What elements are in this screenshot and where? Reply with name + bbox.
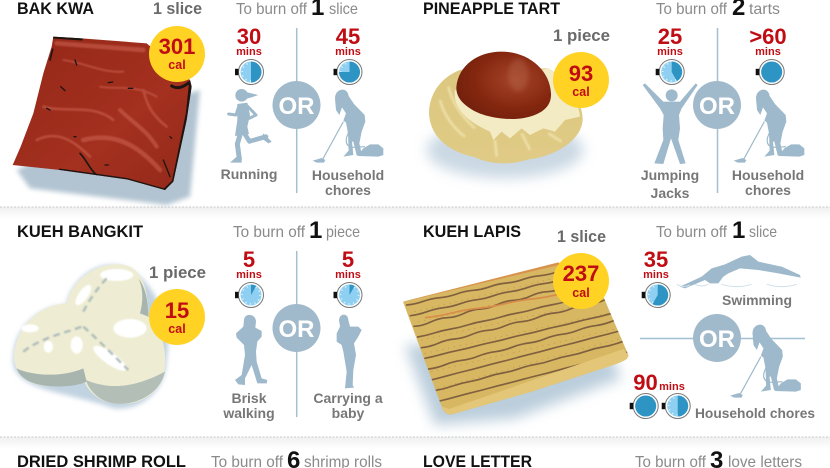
label: household chores: chores [745, 182, 791, 198]
stopwatch: chores 45 mins: mins [335, 46, 361, 58]
stopwatch: carrying a baby 5 mins: 5 [342, 247, 354, 272]
stopwatch: jumping jacks 25 mins: 25 [658, 24, 682, 49]
burn heading [635, 447, 802, 468]
label: jumping jacks: Jumping [641, 167, 699, 183]
divider and OR [693, 28, 741, 193]
illustration: pineapple tart [427, 52, 583, 178]
burn heading [211, 447, 382, 468]
burn heading [236, 0, 358, 21]
icon: person vacuuming [730, 325, 801, 398]
calorie badge: 237 cal [553, 253, 609, 309]
calorie badge: 15 cal: cal [168, 322, 186, 336]
panel: dried shrimp roll [17, 447, 382, 468]
stopwatches: chores 90 mins: 90 [633, 370, 658, 395]
stopwatch: brisk walking 5 mins [235, 247, 264, 308]
serving: 1 piece: 1 piece [149, 263, 206, 282]
icon: person vacuuming [313, 90, 383, 163]
panel: kueh lapis [403, 217, 815, 425]
stopwatch: running 30 mins [235, 24, 264, 84]
stopwatch: chores over 60 mins: mins [755, 46, 781, 58]
calorie badge: 93 cal: cal [572, 85, 590, 99]
burn heading: 1 [309, 217, 322, 244]
title: kueh lapis: KUEH LAPIS [423, 222, 521, 241]
calorie badge: 93 cal: 93 [569, 61, 593, 86]
label: brisk walking [222, 390, 275, 421]
burn heading: To burn off [236, 1, 308, 18]
calorie badge: 237 cal: 237 [563, 261, 599, 286]
burn heading: tarts [749, 1, 780, 18]
stopwatch: brisk walking 5 mins: 5 [243, 247, 255, 272]
stopwatches: chores 90 mins [630, 370, 690, 418]
burn heading [233, 217, 360, 244]
stopwatch: jumping jacks 25 mins [656, 24, 684, 84]
burn heading: To burn off [656, 224, 728, 241]
divider and OR [272, 251, 320, 417]
label: household chores: chores [325, 182, 371, 198]
label: household chores: Household [732, 167, 804, 183]
icon: runner [229, 89, 272, 163]
stopwatch: swimming 35 mins: mins [643, 269, 669, 281]
icon: woman carrying baby [337, 315, 362, 388]
label: household chores: Household [312, 167, 384, 183]
illustration: kueh lapis slice [403, 262, 640, 425]
stopwatch: swimming 35 mins [642, 247, 670, 308]
divider and OR [272, 28, 320, 193]
label: household chores: Household chores [695, 405, 815, 421]
label: carrying a baby: Carrying a [313, 390, 383, 406]
panel: bak kwa [13, 0, 384, 205]
icon: person vacuuming [734, 90, 804, 163]
icon: swimmer [677, 255, 801, 288]
label: brisk walking: Brisk [231, 390, 267, 406]
label: brisk walking: walking [222, 405, 275, 421]
stopwatch: chores 45 mins [334, 24, 362, 84]
stopwatch: running 30 mins: mins [236, 46, 262, 58]
stopwatch: chores over 60 mins [749, 24, 787, 84]
calorie badge: 15 cal: 15 [165, 298, 189, 323]
icon: jumping jacks figure [643, 83, 698, 164]
title: kueh bangkit: KUEH BANGKIT [17, 222, 144, 241]
separator band: upper [0, 207, 830, 219]
burn heading [656, 217, 777, 244]
label: household chores [312, 167, 384, 198]
burn heading: To burn off [656, 1, 728, 18]
divider and OR: OR [278, 316, 314, 343]
stopwatch: jumping jacks 25 mins: mins [657, 46, 683, 58]
label: jumping jacks: Jacks [651, 185, 690, 201]
divider and OR: OR [699, 326, 735, 353]
label: carrying a baby [313, 390, 383, 421]
calorie badge: 301 cal: cal [168, 58, 186, 72]
stopwatch: chores over 60 mins: >60 [749, 24, 787, 49]
label: swimming: Swimming [722, 292, 792, 308]
calorie badge: 15 cal [149, 289, 205, 345]
panel: kueh bangkit [13, 217, 383, 421]
label: jumping jacks [641, 167, 699, 201]
stopwatches: chores 90 mins: mins [659, 381, 685, 393]
burn heading: To burn off [233, 224, 306, 241]
divider and OR [640, 314, 805, 362]
panel: love letter [423, 447, 802, 468]
label: running: Running [221, 166, 277, 182]
calorie badge: 301 cal: 301 [159, 34, 195, 59]
divider and OR: OR [699, 93, 735, 120]
illustration: bak kwa slice [13, 37, 200, 205]
divider and OR: OR [278, 93, 314, 120]
burn heading: slice [329, 1, 358, 18]
icon: walker [235, 315, 267, 385]
burn heading: piece [326, 224, 360, 241]
stopwatch: swimming 35 mins: 35 [644, 247, 668, 272]
burn heading: 1 [732, 217, 745, 244]
label: household chores [732, 167, 804, 198]
stopwatch: chores 45 mins: 45 [336, 24, 360, 49]
stopwatch: running 30 mins: 30 [237, 24, 261, 49]
calorie badge: 237 cal: cal [572, 286, 590, 300]
label: carrying a baby: baby [332, 405, 365, 421]
serving: 1 piece: 1 piece [553, 26, 610, 45]
stopwatch: carrying a baby 5 mins: mins [335, 269, 361, 281]
calorie badge: 93 cal [553, 52, 609, 108]
serving: 1 slice: 1 slice [557, 227, 606, 246]
stopwatch: brisk walking 5 mins: mins [236, 269, 262, 281]
panel: pineapple tart [423, 0, 804, 201]
burn heading: slice [749, 224, 777, 241]
burn heading [656, 0, 780, 21]
illustration: kueh bangkit [13, 264, 168, 409]
calorie badge: 301 cal [149, 26, 205, 82]
stopwatch: carrying a baby 5 mins [334, 247, 362, 308]
